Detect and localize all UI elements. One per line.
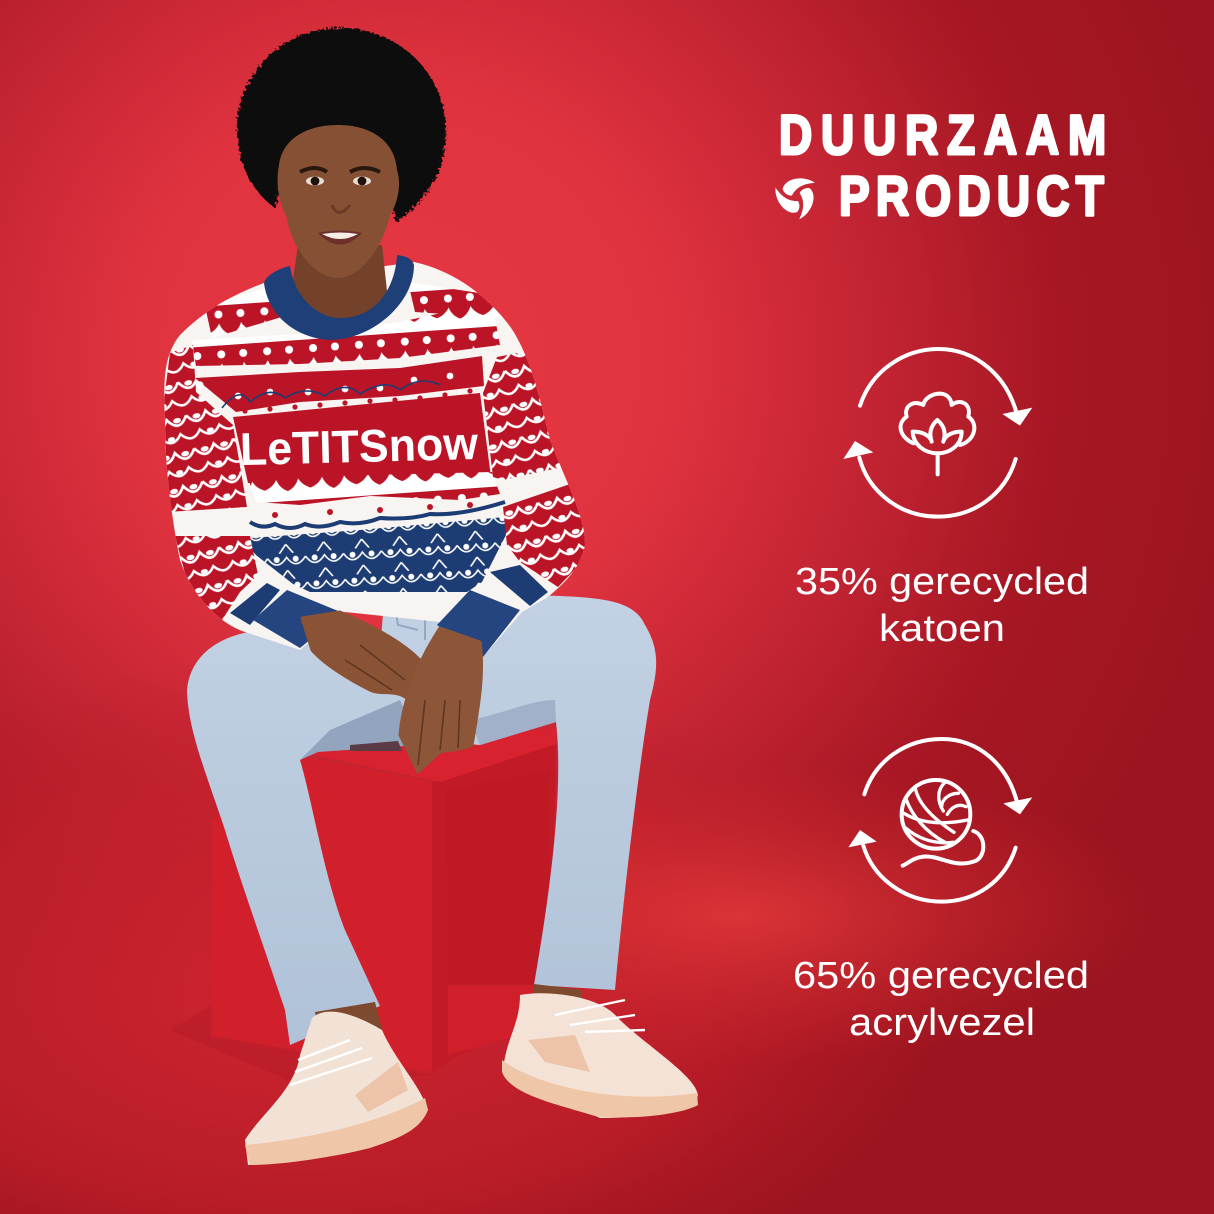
text: 65% gerecycled acrylvezel: 65% gerecycled — [793, 955, 1089, 997]
navy diamond band right — [490, 565, 548, 606]
chest scallop band — [192, 302, 500, 366]
left shoe — [245, 1012, 428, 1165]
left sleeve lower — [175, 536, 258, 620]
shoulder scallops — [205, 288, 285, 338]
face — [278, 125, 399, 278]
red sweater field — [233, 393, 491, 483]
jeans — [187, 590, 656, 1045]
left sleeve — [164, 345, 247, 512]
icon: yarn ball with recycling arrows — [848, 739, 1032, 902]
text: 35% gerecycled katoen: 35% gerecycled — [795, 561, 1089, 603]
afro hair — [237, 28, 446, 222]
left hand — [302, 612, 421, 697]
right shoe — [502, 993, 698, 1118]
lower red scallops — [248, 472, 500, 505]
navy stripe — [250, 502, 505, 528]
icon: cotton with recycling arrows — [843, 349, 1032, 517]
red box seat — [170, 728, 556, 1085]
text: 65% gerecycled acrylvezel — [793, 955, 1089, 1044]
right sleeve upper — [483, 352, 561, 480]
right hand — [400, 628, 482, 772]
neck — [290, 245, 388, 321]
sweater slogan: LeTITSnow — [239, 417, 479, 475]
bead row — [242, 388, 473, 414]
photo: seated man — [150, 28, 698, 1165]
red dots on white band — [272, 502, 473, 518]
collar — [264, 255, 414, 340]
ankles — [315, 1002, 382, 1040]
right sleeve lower — [503, 483, 590, 587]
navy mosaic — [250, 517, 507, 592]
heading: DUURZAAM: DUURZAAM — [779, 104, 1106, 166]
text: 65% gerecycled acrylvezel: acrylvezel — [849, 1002, 1035, 1044]
left cuff — [253, 590, 343, 648]
second red band — [195, 356, 484, 412]
icon: recycle leaves — [772, 178, 819, 221]
text: 35% gerecycled katoen: katoen — [879, 608, 1005, 650]
sweater — [164, 262, 585, 657]
navy diamond band left — [230, 583, 280, 625]
heading: PRODUCT: PRODUCT — [839, 165, 1104, 227]
right cuff — [437, 590, 520, 657]
text: 35% gerecycled katoen — [795, 561, 1089, 650]
